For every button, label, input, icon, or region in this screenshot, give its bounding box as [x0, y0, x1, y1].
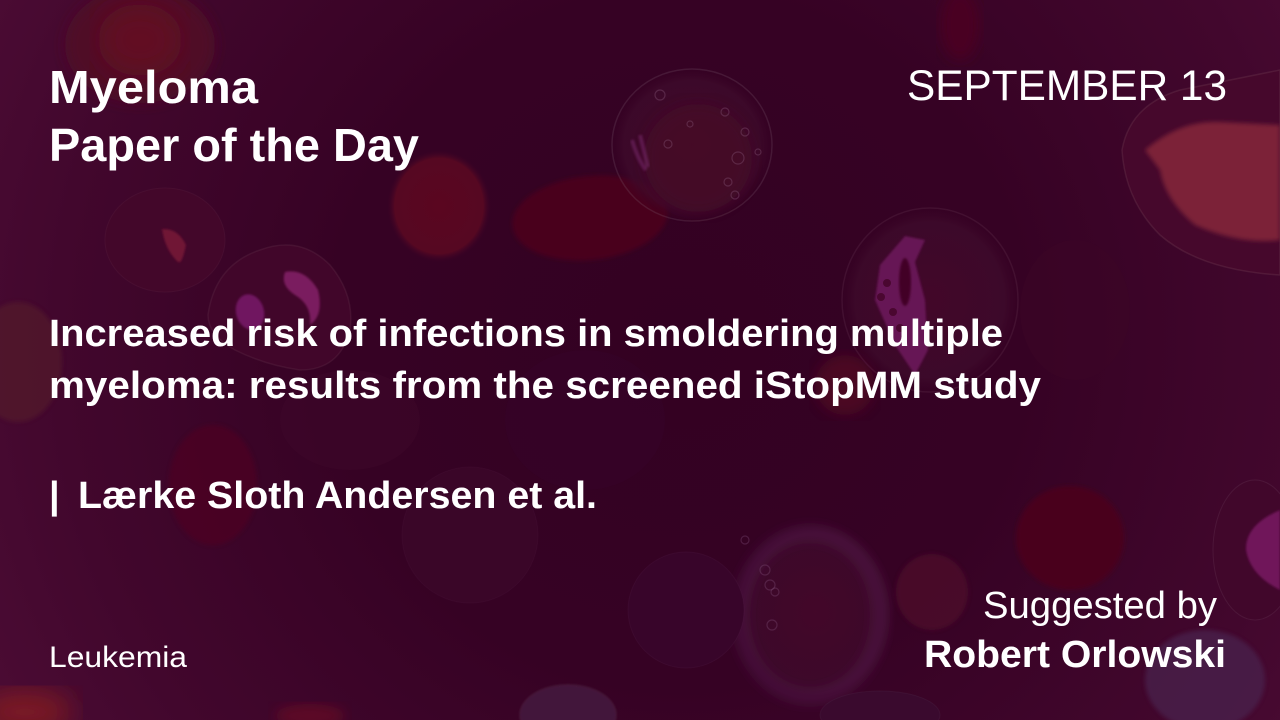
journal: Leukemia [49, 641, 187, 674]
heading: Myeloma Paper of the Day [49, 61, 419, 171]
cell upper left [105, 188, 225, 292]
suggested by: Robert Orlowski [924, 634, 1226, 676]
red cell lower left [169, 425, 257, 545]
cell right lower [1213, 480, 1280, 620]
white cell top centre [612, 69, 772, 221]
cell right top [1122, 70, 1280, 275]
authors: | [49, 475, 60, 517]
cell left edge [0, 302, 62, 422]
red cell top centre [387, 150, 491, 262]
heading: Myeloma Paper of the Day: Paper of the Day [49, 119, 419, 171]
cell top left [65, 0, 215, 103]
paper title: myeloma: results from the screened iStopMM study [49, 365, 1041, 407]
red cell elongated [508, 168, 672, 268]
white cell right centre [842, 208, 1018, 392]
date: SEPTEMBER 13 [907, 62, 1227, 110]
paper title: Increased risk of infections in smoldering multiple [49, 313, 1003, 355]
red cell lower right [1016, 486, 1124, 590]
authors: Lærke Sloth Andersen et al. [78, 475, 597, 517]
suggested by [924, 585, 1226, 676]
white cell bottom centre [733, 520, 897, 704]
cell with two lobes [208, 245, 351, 370]
heading: Myeloma Paper of the Day: Myeloma [49, 61, 258, 113]
suggested by: Suggested by [983, 585, 1217, 627]
paper title [49, 313, 1041, 407]
faint cells [628, 552, 744, 668]
small cell lower right [896, 554, 968, 630]
cell bottom [520, 685, 616, 720]
cell bottom right [1145, 630, 1265, 720]
